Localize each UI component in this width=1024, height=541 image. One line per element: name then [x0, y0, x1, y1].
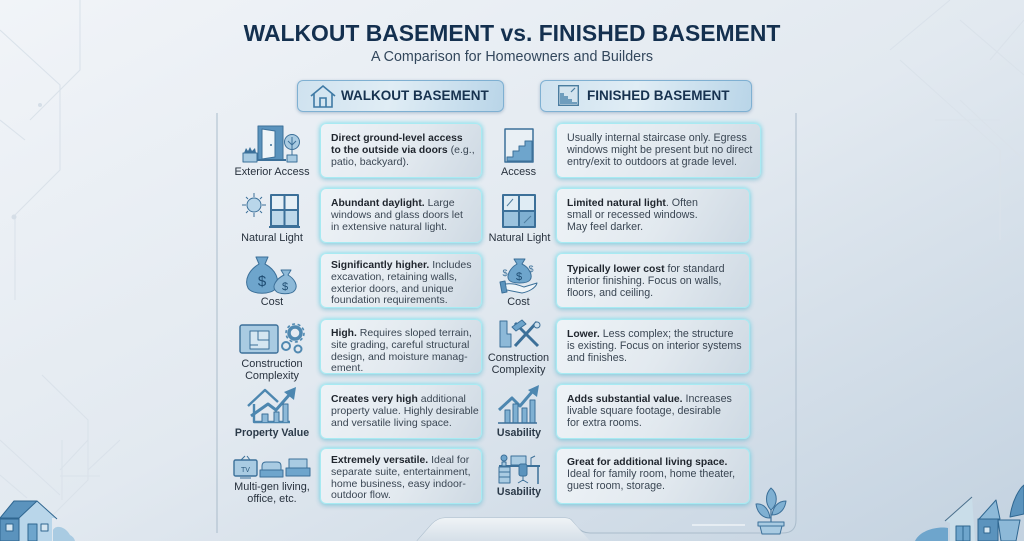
house bottom left — [0, 501, 75, 541]
card: finished usability — [556, 448, 750, 504]
card: finished access: windows might be present but no direct — [567, 144, 752, 156]
card: walkout usability: outdoor flow. — [331, 489, 391, 501]
card: finished access: entry/exit to outdoors at grade level. — [567, 156, 737, 168]
right: construction ruler and tools: Construction — [488, 352, 549, 364]
left: natural light — [241, 193, 303, 244]
card: walkout natural light: windows and glass doors let — [331, 209, 463, 221]
title: WALKOUT BASEMENT vs. FINISHED BASEMENT — [244, 20, 780, 46]
card: walkout usability: Extremely versatile. Ideal for — [331, 454, 469, 466]
card: finished property value: for extra rooms. — [567, 417, 642, 429]
card: walkout property value: Creates very high additional — [331, 393, 466, 405]
card: walkout cost: exterior doors, and unique — [331, 283, 454, 295]
right: usability value chart: Usability — [497, 427, 541, 439]
card: finished usability: guest room, storage. — [567, 480, 665, 492]
card: finished natural light: May feel darker. — [567, 221, 643, 233]
card: finished construction complexity: Lower. Less complex; the structure — [567, 328, 733, 340]
left: construction blueprint and gears: Complexity — [245, 370, 299, 382]
card: finished access — [556, 123, 761, 178]
left: cost money bags — [247, 257, 296, 308]
right: access stairs: Access — [501, 166, 537, 178]
left: multi-gen tv sofa bed: Multi-gen living, — [234, 481, 310, 493]
right: cost hand and bag — [500, 259, 537, 308]
right: cost hand and bag: $ — [502, 268, 508, 278]
card: walkout usability: home business, easy indoor- — [331, 478, 466, 490]
card: finished access: Usually internal staircase only. Egress — [567, 132, 747, 144]
card: finished usability: Ideal for family room, home theater, — [567, 468, 735, 480]
card: finished construction complexity: and finishes. — [567, 352, 627, 364]
right: usability value chart — [497, 385, 541, 439]
card: walkout exterior access — [320, 123, 482, 178]
icon: stairs frame — [558, 85, 579, 106]
card: walkout natural light: Abundant daylight. Large — [331, 197, 455, 209]
right: cost hand and bag: Cost — [507, 296, 530, 308]
card: walkout construction complexity: ement. — [331, 362, 363, 374]
left: construction blueprint and gears: Construction — [241, 358, 303, 370]
left: cost money bags: $ — [258, 273, 267, 290]
left: construction blueprint and gears — [240, 324, 304, 382]
left: cost money bags: $ — [282, 281, 288, 293]
right: cost hand and bag: $ — [528, 264, 534, 274]
card: finished construction complexity: is existing. Focus on interior systems — [567, 340, 742, 352]
right: natural light window: Natural Light — [489, 232, 550, 244]
card: walkout exterior access: patio, backyard). — [331, 156, 409, 168]
card: walkout cost: excavation, retaining walls, — [331, 271, 457, 283]
subtitle: A Comparison for Homeowners and Builders — [371, 49, 653, 65]
card: walkout construction complexity: High. Requires sloped terrain, — [331, 327, 472, 339]
card: finished cost: interior finishing. Focus on walls, — [567, 275, 721, 287]
card: finished cost: Typically lower cost for standard — [567, 263, 725, 275]
card: walkout cost: Significantly higher. Includes — [331, 259, 472, 271]
card: walkout property value: and versatile living space. — [331, 417, 452, 429]
card: walkout usability — [320, 448, 482, 504]
card: finished cost: floors, and ceiling. — [567, 287, 653, 299]
card: finished usability: Great for additional living space. — [567, 457, 727, 468]
header: finished basement — [540, 80, 752, 112]
card: walkout construction complexity — [320, 319, 482, 374]
houses and leaf bottom right — [915, 485, 1024, 541]
card: finished construction complexity — [556, 319, 750, 374]
card: walkout exterior access: to the outside via doors (e.g., — [331, 144, 475, 156]
right: construction ruler and tools — [488, 320, 549, 376]
plant in pot — [756, 488, 786, 534]
card: finished natural light — [556, 188, 750, 243]
card: walkout usability: separate suite, entertainment, — [331, 466, 471, 478]
left: property value — [235, 387, 309, 439]
card: finished property value: Adds substantial value. Increases — [567, 393, 732, 405]
card: finished natural light: small or recessed windows. — [567, 209, 698, 221]
card: finished cost — [556, 253, 750, 308]
card: walkout property value — [320, 384, 482, 439]
card: walkout cost — [320, 253, 482, 308]
card: walkout construction complexity: site grading, careful structural — [331, 339, 469, 351]
left: multi-gen tv sofa bed — [234, 456, 310, 505]
left: exterior access — [234, 126, 310, 178]
card: finished natural light: Limited natural light. Often — [567, 197, 698, 209]
right: access stairs — [501, 129, 537, 178]
card: finished property value — [556, 384, 750, 439]
right: cost hand and bag: $ — [516, 271, 522, 283]
right: natural light window — [489, 195, 550, 244]
header label: FINISHED BASEMENT — [587, 88, 730, 103]
card: walkout exterior access: Direct ground-level access — [331, 133, 463, 144]
left: multi-gen tv sofa bed: office, etc. — [247, 493, 297, 505]
card: walkout construction complexity: design, and moisture manag- — [331, 351, 468, 363]
card: finished property value: livable square footage, desirable — [567, 405, 721, 417]
right: usability desk: Usability — [497, 486, 541, 498]
header: walkout basement — [297, 80, 504, 112]
right: construction ruler and tools: Complexity — [492, 364, 546, 376]
left: exterior access: Exterior Access — [234, 166, 310, 178]
header label: WALKOUT BASEMENT — [341, 88, 489, 103]
left: cost money bags: Cost — [261, 296, 283, 308]
icon: house — [310, 85, 336, 108]
card: walkout natural light — [320, 188, 482, 243]
card: walkout natural light: in extensive natural light. — [331, 221, 447, 233]
card: walkout property value: property value. Highly desirable — [331, 405, 479, 417]
right: usability desk — [497, 455, 541, 498]
left: natural light: Natural Light — [241, 232, 303, 244]
left: property value: Property Value — [235, 427, 309, 439]
left: multi-gen tv sofa bed: TV — [241, 467, 250, 474]
card: walkout cost: foundation requirements. — [331, 294, 448, 306]
